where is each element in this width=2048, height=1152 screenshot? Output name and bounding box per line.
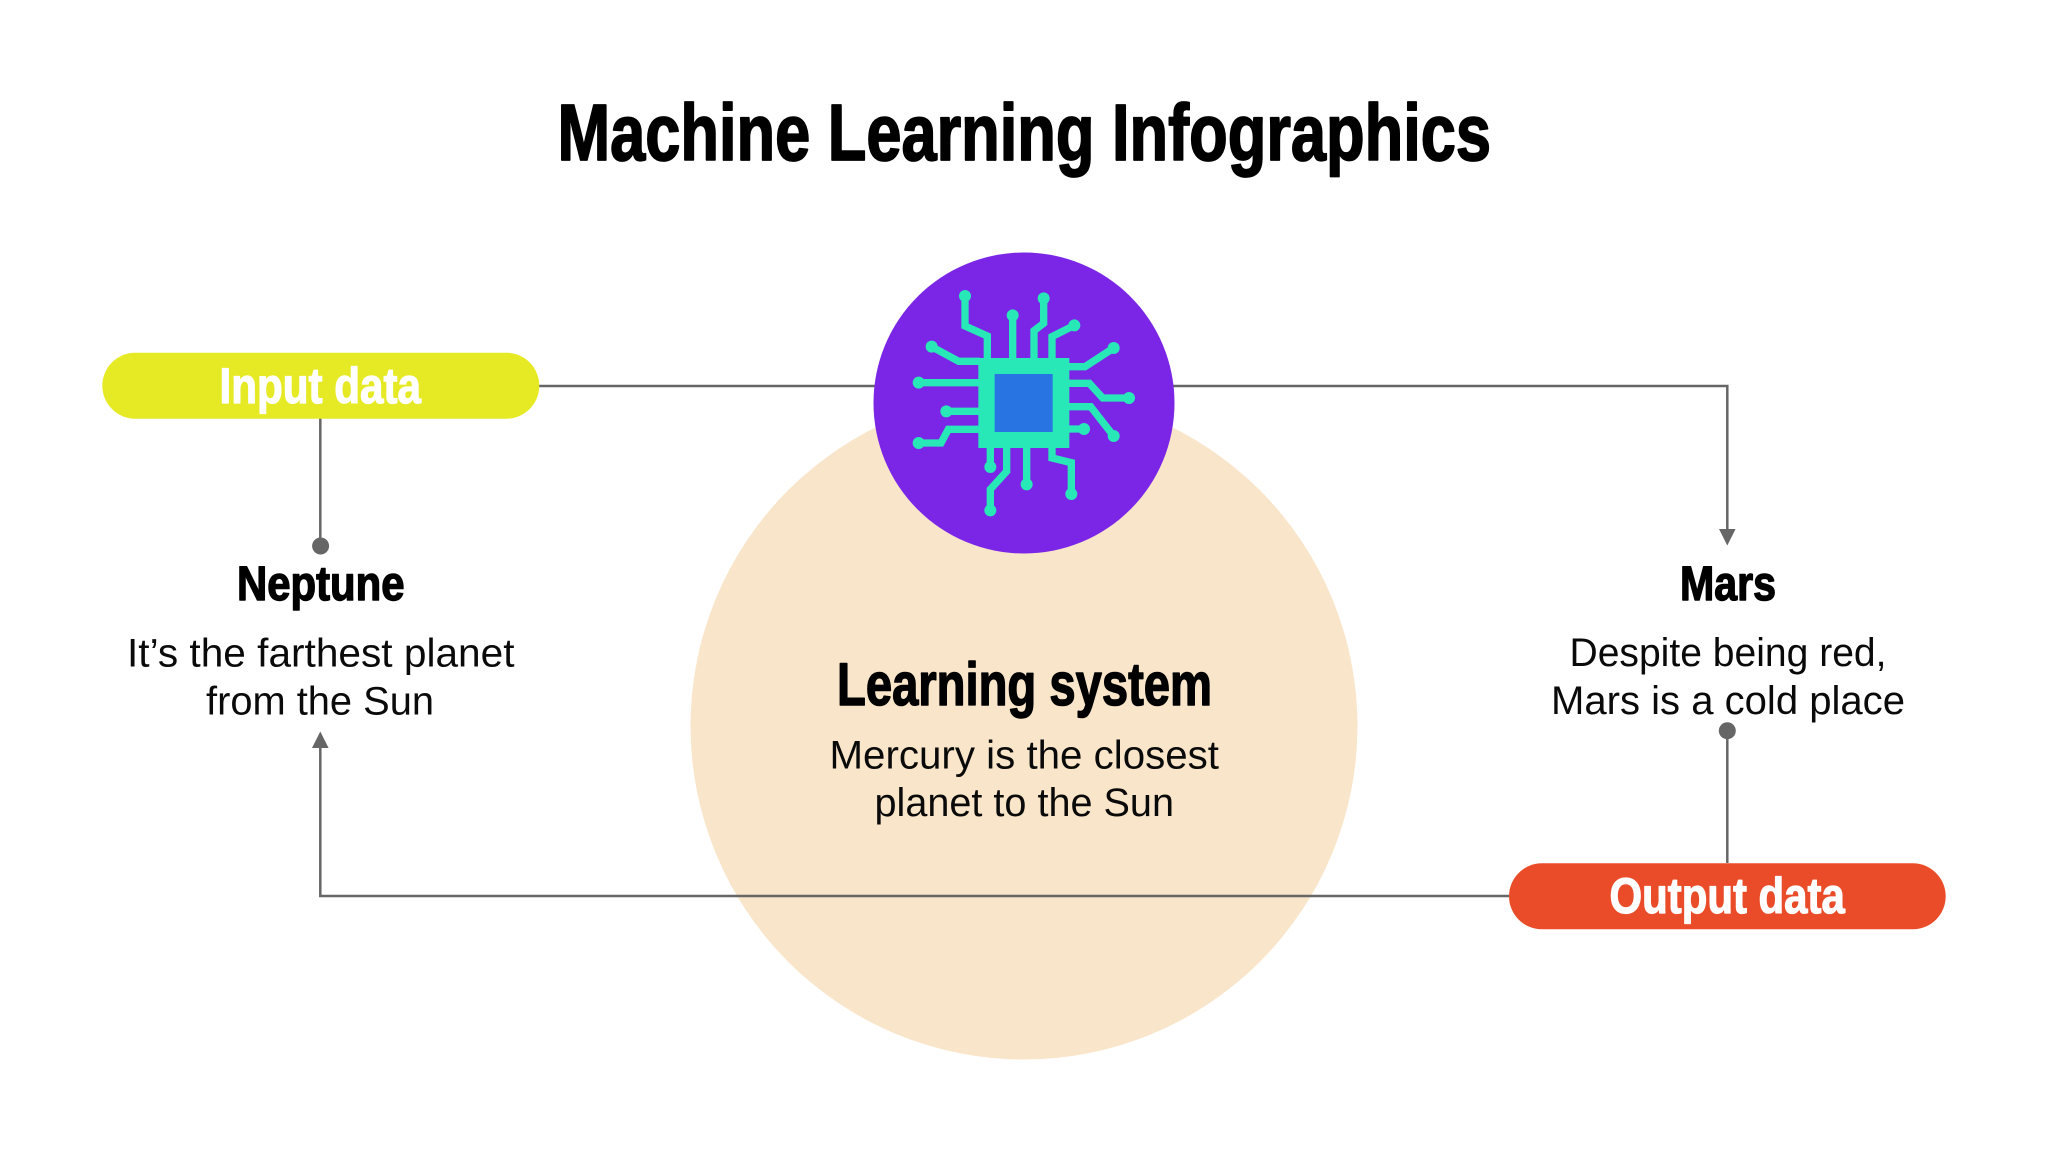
text block: learning system: planet to the Sun	[874, 781, 1174, 825]
connector: Mars to output data	[1719, 722, 1736, 863]
text block: Neptune: from the Sun	[206, 680, 434, 724]
arrow: output data to Neptune	[312, 732, 1509, 896]
circuit traces	[913, 290, 1135, 516]
text block: learning system: Mercury is the closest	[830, 733, 1219, 777]
pill: output data	[1509, 863, 1946, 929]
chip body	[978, 358, 1069, 448]
text block: learning system	[830, 651, 1219, 825]
text block: Mars	[1551, 558, 1905, 723]
pill: output data: Output data	[1610, 868, 1846, 924]
text block: Mars: Mars	[1680, 558, 1776, 611]
title: Machine Learning Infographics	[558, 88, 1491, 177]
chip core	[995, 374, 1053, 432]
text block: Neptune: It’s the farthest planet	[127, 632, 514, 676]
text block: Neptune	[127, 558, 514, 724]
text block: Mars: Despite being red,	[1570, 631, 1886, 675]
pill: input data	[102, 353, 539, 419]
panel: learning system circle	[690, 392, 1358, 1060]
text block: Neptune: Neptune	[237, 558, 404, 611]
purple circle	[874, 252, 1174, 554]
pill: input data: Input data	[220, 358, 422, 414]
icon: processor chip in purple circle	[874, 252, 1174, 554]
text block: Mars: Mars is a cold place	[1551, 679, 1905, 723]
text block: learning system: Learning system	[837, 651, 1212, 718]
connector: input data to Neptune	[312, 418, 329, 554]
arrow: input data to Mars	[539, 386, 1736, 546]
